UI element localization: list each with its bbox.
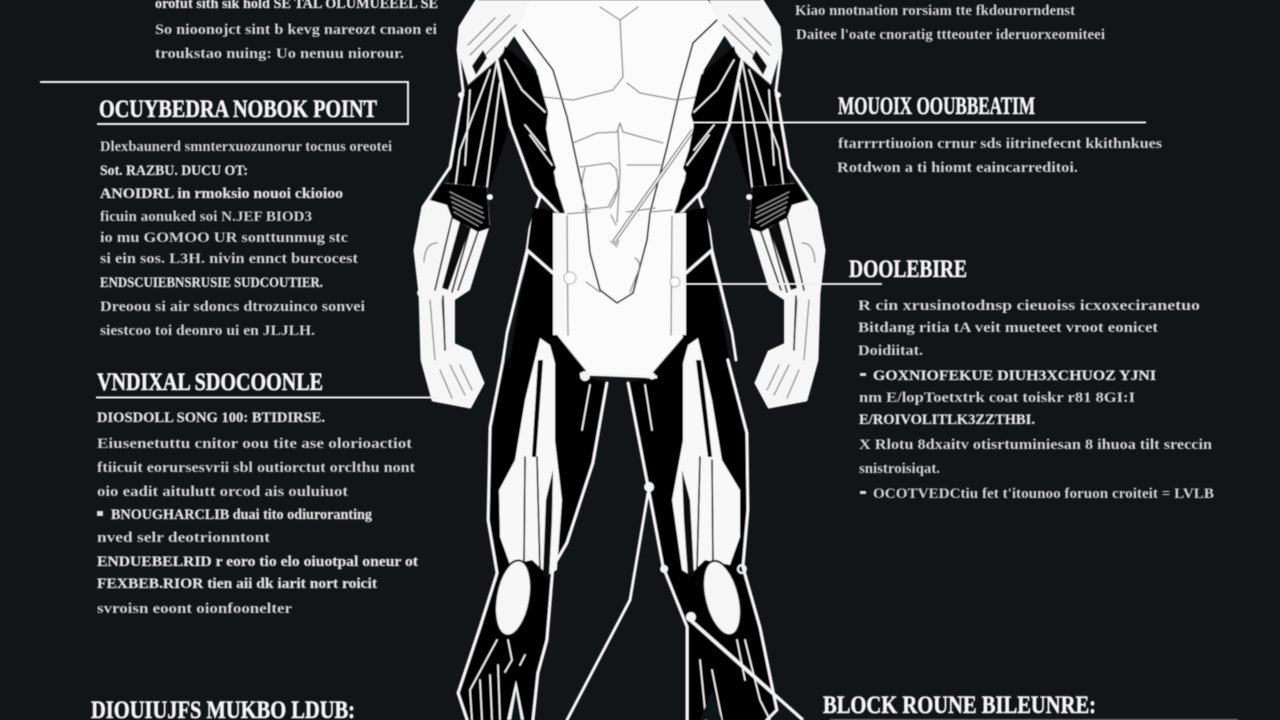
- left arm and side: [415, 0, 568, 407]
- torso: [510, 0, 728, 376]
- heading box: point: [40, 82, 408, 124]
- right text block 3: X Rlotu 8dxaitv otisrtuminiesan 8 ihuoa tilt sreccin: [859, 437, 1212, 453]
- left text block 3: oio eadit aitulutt orcod ais ouluiuot: [97, 484, 348, 500]
- right text block 2: [837, 136, 1162, 176]
- anatomical body figure: [415, 0, 824, 720]
- left text block 2: ficuin aonuked soi N.JEF BIOD3: [100, 209, 312, 225]
- left text block 2: siestcoo toi deonro ui en JLJLH.: [100, 323, 315, 339]
- heading box: point: OCUYBEDRA NOBOK POINT: [99, 96, 377, 123]
- left text block 2: Sot. RAZBU. DUCU OT:: [100, 163, 248, 179]
- right arm and side: [671, 0, 824, 407]
- left leg: [458, 335, 607, 720]
- left upper text block: troukstao nuing: Uo nenuu niorour.: [155, 46, 404, 62]
- left text block 3: svroisn eoont oionfoonelter: [97, 601, 293, 617]
- right text block 3: E/ROIVOLITLK3ZZTHBI.: [859, 412, 1035, 428]
- left text block 3: DIOSDOLL SONG 100: BTIDIRSE.: [97, 410, 325, 426]
- right top text block: [795, 3, 1105, 43]
- left text block 3: Eiusenetuttu cnitor oou tite ase olorioactiot: [97, 436, 412, 452]
- bottom right heading: BLOCK ROUNE BILEUNRE:: [823, 692, 1096, 719]
- left text block 2: io mu GOMOO UR sonttunmug stc: [100, 230, 349, 246]
- right text block 3: [858, 298, 1214, 502]
- left text block 2: si ein sos. L3H. nivin ennct burcocest: [100, 251, 358, 267]
- heading: oubbeatim: MOUOIX OOUBBEATIM: [838, 93, 1035, 120]
- right text block 2: ftarrrrtiuoion crnur sds iitrinefecnt kkithnkues: [838, 136, 1162, 152]
- left text block 2: [100, 139, 392, 339]
- right leg: [628, 335, 777, 720]
- left upper text block: [155, 0, 438, 62]
- left text block 3: nved selr deotrionntont: [97, 530, 270, 546]
- left text block 3: BNOUGHARCLIB duai tito odiuroranting: [111, 507, 373, 523]
- groin band: [580, 374, 657, 377]
- left upper text block: So nioonojct sint b kevg nareozt cnaon ei: [155, 22, 437, 38]
- right top text block: Daitee l'oate cnoratig ttteouter ideruorxeomiteei: [796, 27, 1105, 43]
- left text block 2: Dlexbaunerd smnterxuozunorur tocnus oreotei: [100, 139, 392, 155]
- right text block 3: snistroisiqat.: [859, 461, 940, 477]
- right text block 3: Doidiitat.: [858, 343, 923, 359]
- heading: sdocoonle: VNDIXAL SDOCOONLE: [97, 369, 323, 396]
- right top text block: Kiao nnotnation rorsiam tte fkdourorndenst: [795, 3, 1075, 19]
- right text block 2: Rotdwon a ti hiomt eaincarreditoi.: [837, 160, 1078, 176]
- left text block 3: [97, 410, 418, 617]
- left text block 3: FEXBEB.RIOR tien aii dk iarit nort roicit: [97, 576, 377, 592]
- leader lines and joint nodes: [564, 272, 803, 720]
- left text block 3: ENDUEBELRID r eoro tio elo oiuotpal oneur ot: [97, 554, 418, 570]
- right text block 3: R cin xrusinotodnsp cieuoiss icxoxeciranetuo: [858, 298, 1200, 314]
- heading: doolebire: DOOLEBIRE: [849, 256, 967, 283]
- left text block 3: ftiicuit eorursesvrii sbl outiorctut orclthu nont: [97, 460, 415, 476]
- right text block 3: OCOTVEDCtiu fet t'itounoo foruon croiteit = LVLB: [873, 486, 1214, 502]
- right text block 3: nm E/lopToetxtrk coat toiskr r81 8GI:I: [859, 390, 1135, 406]
- left text block 2: Dreoou si air sdoncs dtrozuinco sonvei: [100, 299, 365, 315]
- left text block 2: ENDSCUIEBNSRUSIE SUDCOUTIER.: [100, 275, 323, 291]
- right text block 3: GOXNIOFEKUE DIUH3XCHUOZ YJNI: [873, 368, 1156, 384]
- left text block 2: ANOIDRL in rmoksio nouoi ckioioo: [100, 186, 343, 202]
- right text block 3: Bitdang ritia tA veit mueteet vroot eonicet: [858, 320, 1158, 336]
